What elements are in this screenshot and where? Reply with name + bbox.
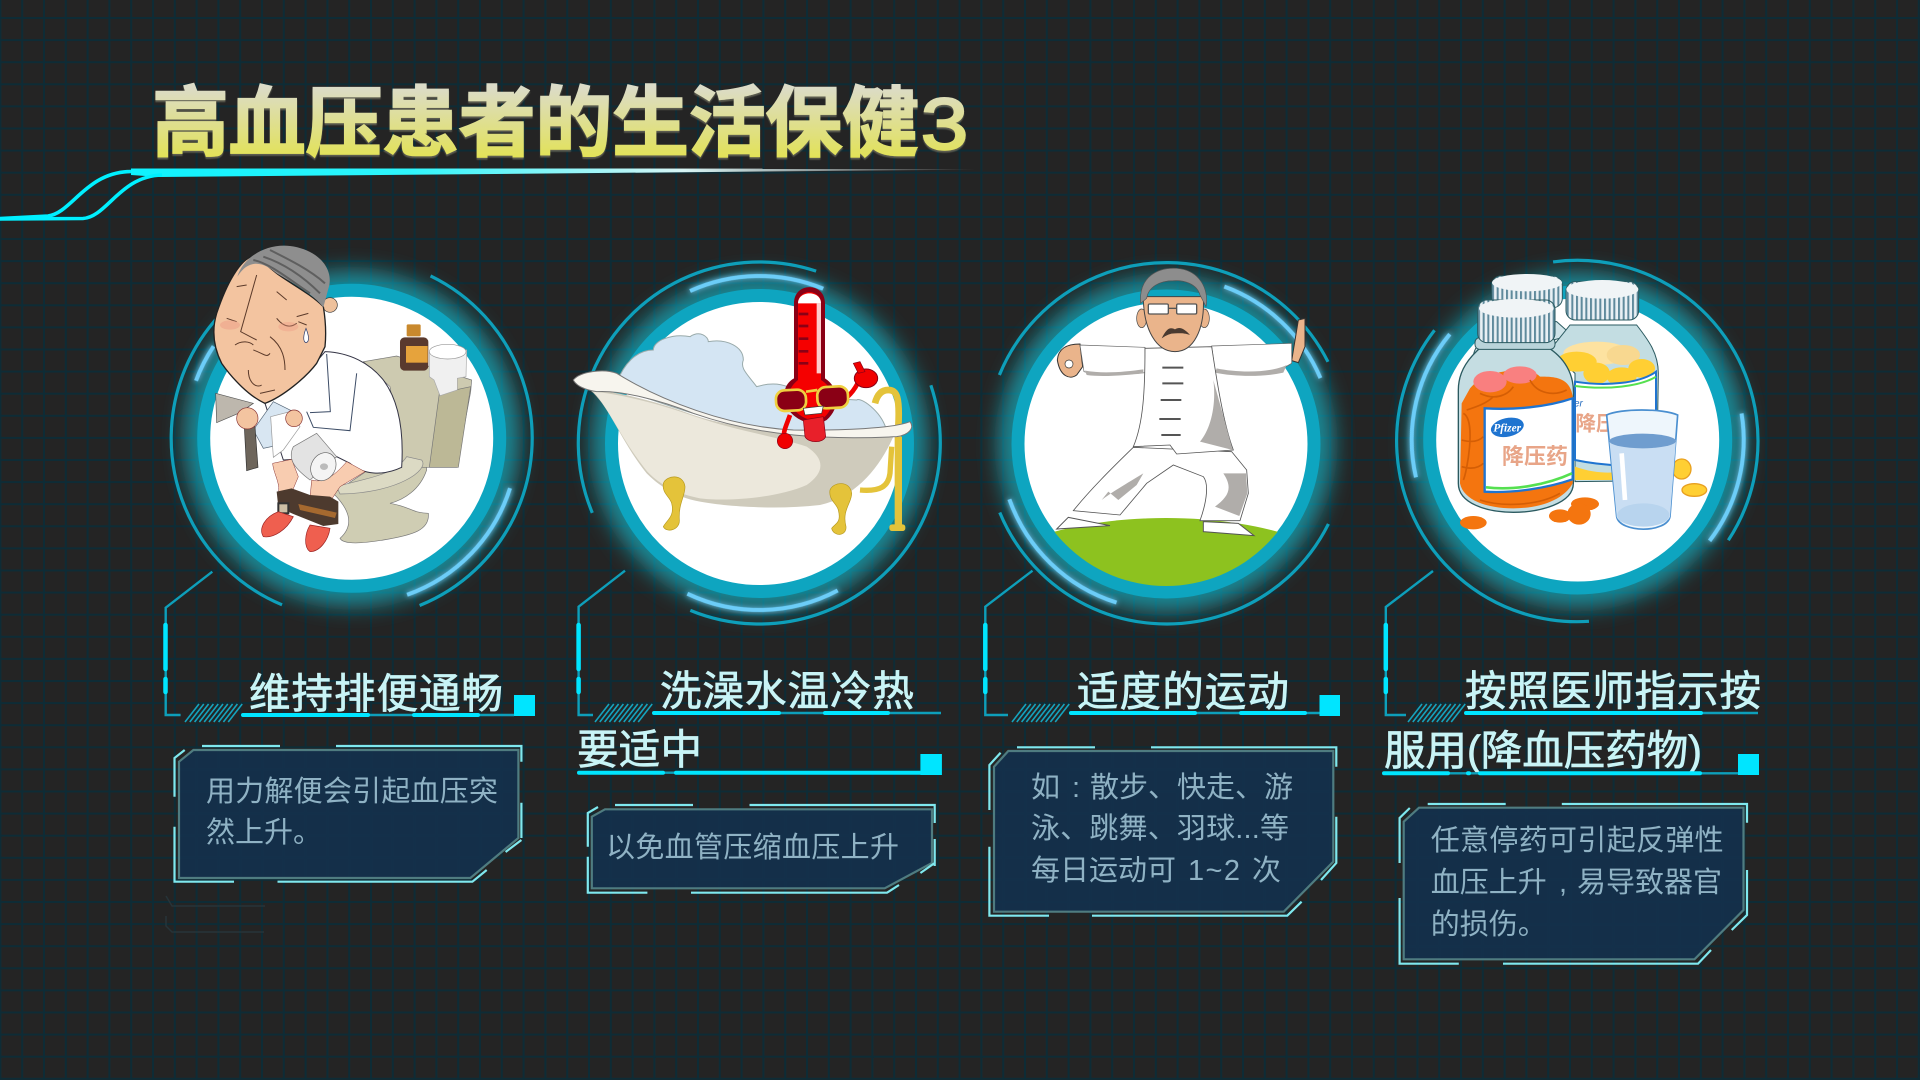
ring glow	[200, 286, 504, 590]
text box: 用力解便会引起血压突	[206, 775, 498, 808]
text box: ,	[1559, 867, 1567, 899]
text box: :	[1072, 772, 1080, 804]
square marker	[514, 695, 535, 716]
text box	[989, 747, 1336, 916]
ring glow	[1014, 292, 1318, 596]
leader line	[166, 572, 212, 715]
text box: 如	[1031, 771, 1060, 804]
circle badge	[612, 296, 908, 592]
title underline swoosh	[0, 168, 976, 219]
illustration: pill bottles and water glass: Pfizer	[1493, 423, 1522, 435]
leader line	[985, 571, 1032, 715]
panel: bath temperature	[522, 206, 996, 893]
heading: 维持排便通畅: 维持排便通畅	[249, 670, 503, 717]
square marker	[1738, 754, 1759, 775]
square marker	[1320, 695, 1340, 716]
illustration: pill bottles and water glass	[1458, 274, 1707, 529]
orbit arcs	[110, 197, 593, 680]
text box: 每日运动可	[1031, 854, 1176, 887]
square marker	[920, 754, 942, 775]
faint decorative bracket	[166, 896, 265, 932]
circle badge	[1430, 292, 1726, 588]
text box: 的损伤。	[1431, 908, 1547, 941]
text box: 任意停药可引起反弹性	[1431, 824, 1724, 857]
heading: 适度的运动: 适度的运动	[1077, 668, 1289, 715]
text box: 1~2	[1188, 855, 1240, 887]
hatch	[185, 704, 242, 722]
ring glow	[608, 292, 912, 596]
illustration: tai chi man	[1057, 268, 1305, 536]
illustration: man on toilet	[214, 246, 472, 552]
circle badge	[1018, 296, 1314, 592]
illustration: pill bottles and water glass: er	[1574, 399, 1584, 410]
text box	[588, 805, 935, 893]
title: 3	[921, 85, 968, 165]
orbit arcs	[522, 206, 996, 680]
text box: 泳、跳舞、羽球...等	[1031, 812, 1289, 845]
leader highlight	[163, 625, 168, 692]
text box: 散步、快走、游	[1090, 771, 1293, 804]
text box: 次	[1252, 854, 1281, 887]
heading: 按照医师指示按服用(降血压药物): 按照医师指示按	[1465, 668, 1761, 714]
illustration: bathtub with thermometer	[573, 287, 912, 534]
illustration: pill bottles and water glass: 降压	[1575, 413, 1617, 436]
illustration: pill bottles and water glass: 降压药	[1502, 444, 1568, 469]
leader highlight	[1384, 625, 1388, 692]
heading underlines	[1383, 713, 1758, 773]
text box: 以免血管压缩血压上升	[606, 831, 899, 864]
text box	[174, 746, 521, 882]
heading underline	[242, 714, 514, 716]
heading: 按照医师指示按服用(降血压药物)	[1384, 668, 1761, 774]
green ground	[1054, 518, 1278, 586]
leader line	[1386, 571, 1433, 715]
circle badge	[204, 290, 500, 586]
hatch	[1408, 704, 1465, 722]
heading: 洗澡水温冷热要适中: 要适中	[577, 726, 702, 773]
leader highlight	[576, 625, 581, 692]
leader highlight	[983, 625, 988, 692]
leader line	[579, 571, 625, 715]
text box: 血压上升	[1431, 866, 1547, 899]
panel: medication	[1374, 238, 1781, 964]
text box	[1400, 804, 1747, 964]
heading underline	[1070, 712, 1320, 714]
title: 高血压患者的生活保健	[152, 81, 919, 167]
panel: bowel movement	[110, 197, 593, 932]
orbit arcs	[1374, 238, 1781, 644]
ring glow	[1426, 288, 1730, 592]
heading underlines	[578, 713, 941, 773]
text box: 然上升。	[206, 816, 322, 849]
heading: 洗澡水温冷热要适中: 洗澡水温冷热	[660, 668, 914, 714]
text box: 易导致器官	[1577, 866, 1722, 899]
hatch	[1012, 704, 1069, 722]
heading: 按照医师指示按服用(降血压药物): 服用(降血压药物)	[1384, 727, 1702, 774]
orbit arcs	[924, 201, 1409, 686]
heading: 洗澡水温冷热要适中	[577, 668, 914, 773]
hatch	[595, 704, 652, 722]
panel: moderate exercise	[983, 261, 1348, 917]
